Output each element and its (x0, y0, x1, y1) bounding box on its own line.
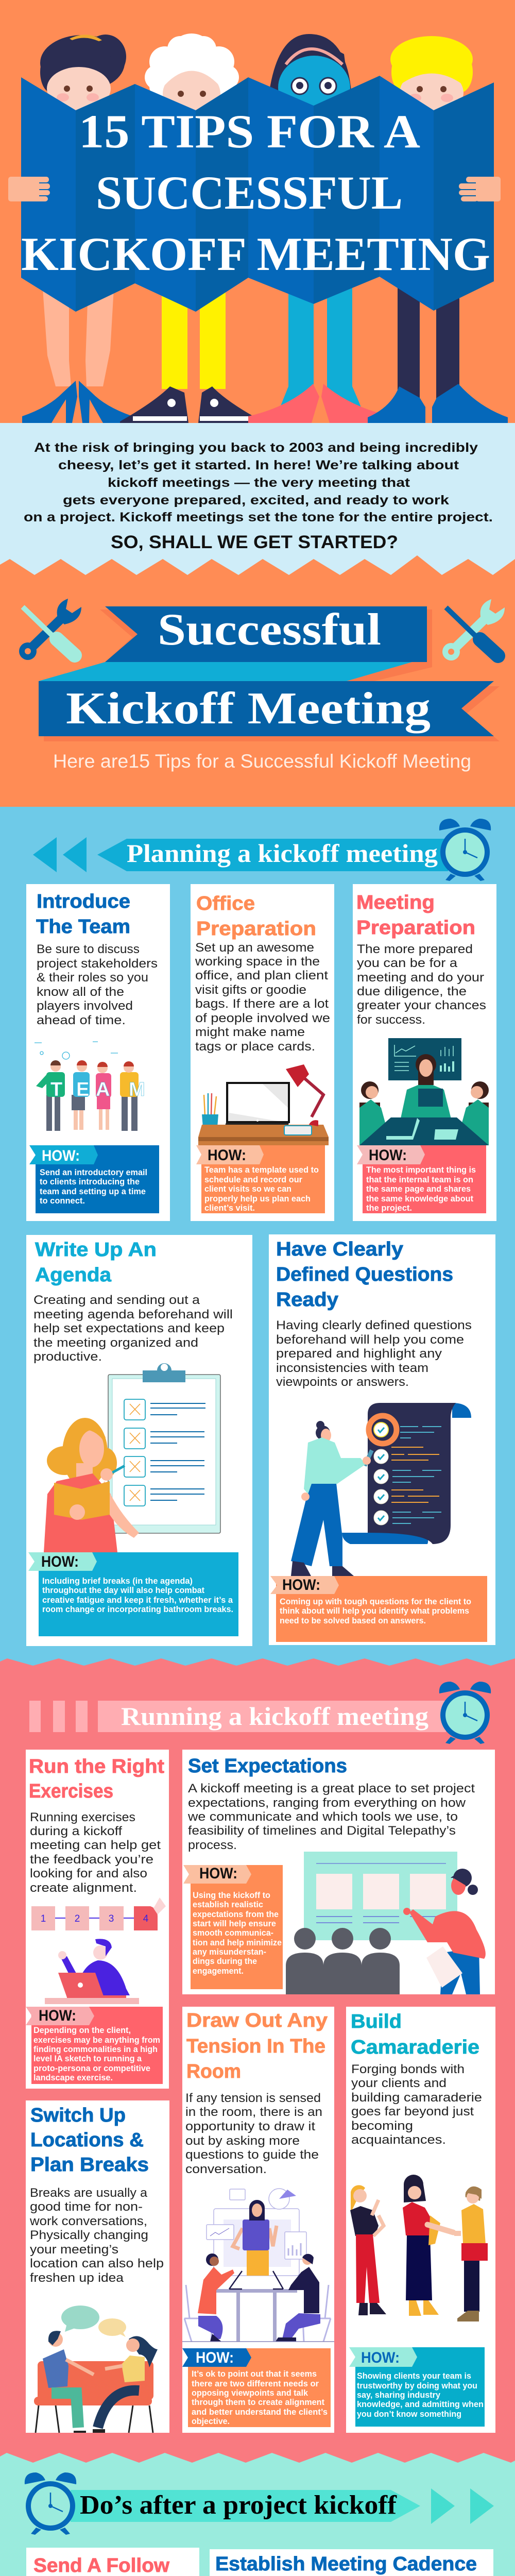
body text: meeting can help get (30, 1838, 161, 1852)
how callout (196, 1145, 325, 1213)
how callout: HOW: (41, 1553, 79, 1570)
how callout: client visits so we can (204, 1184, 291, 1194)
body text: viewpoints or answers. (276, 1375, 409, 1389)
intro text: At the risk of bringing you back to 2003 and being incredibly (34, 440, 478, 455)
how callout: Send an introductory email (40, 1168, 147, 1177)
how callout: think about will help you identify what problems (280, 1606, 469, 1616)
heading: Have Clearly (276, 1239, 403, 1260)
illustration: numbered steps and man at laptop: 1 (41, 1913, 46, 1924)
body text: tags or place cards. (195, 1040, 315, 1054)
how callout: to clients introducing the (40, 1177, 140, 1187)
title: 15 TIPS FOR A (79, 105, 420, 158)
body text: might make name (195, 1025, 305, 1039)
body text: greater your chances (357, 998, 486, 1012)
how callout: creative fatigue and keep it fresh, whether it’s a (42, 1596, 233, 1605)
body text: ahead of time. (37, 1013, 126, 1027)
body text: out by asking more (185, 2134, 300, 2148)
illustration: team meeting with board (359, 1038, 489, 1145)
how callout: the same knowledge about (366, 1194, 473, 1204)
body text: working space in the (195, 955, 320, 969)
how callout: schedule and record our (204, 1175, 303, 1184)
illustration: presenter at board with audience (286, 1852, 486, 1994)
how callout (29, 1145, 159, 1213)
call to action: SO, SHALL WE GET STARTED? (111, 532, 398, 552)
how callout: HOW: (369, 1147, 407, 1164)
body text (351, 2062, 482, 2147)
panel: Office Preparation (191, 884, 334, 1221)
person 3 (248, 34, 391, 423)
how callout: establish realistic (193, 1900, 263, 1909)
body text (37, 942, 158, 1027)
how callout: need to be solved based on answers. (280, 1616, 426, 1625)
heading: Introduce (37, 891, 130, 912)
how callout: HOW: (361, 2349, 400, 2366)
how callout: The most important thing is (366, 1165, 476, 1175)
body text: know all of the (37, 985, 124, 999)
ribbon title: Successful Kickoff Meeting (39, 605, 500, 741)
how callout: dings during the (193, 1957, 257, 1966)
heading: Agenda (35, 1264, 112, 1286)
how callout: Showing clients your team is (357, 2371, 471, 2381)
how callout: proto-persona or competitive (33, 2064, 150, 2073)
heading: Establish Meeting Cadence (215, 2553, 477, 2575)
how callout: opposing viewpoints and talk (192, 2388, 308, 2398)
body text: opportunity to draw it (185, 2120, 315, 2133)
body text: work conversations, (29, 2214, 147, 2228)
hands (8, 177, 501, 201)
body text (357, 942, 486, 1027)
how callout: knowledge, and admitting when (357, 2400, 484, 2409)
how callout (357, 1145, 486, 1213)
heading: Build (351, 2011, 402, 2032)
heading: Set Expectations (188, 1755, 347, 1777)
how callout: Coming up with tough questions for the client to (280, 1597, 471, 1606)
panel: Have Clearly Defined Questions Ready (269, 1234, 495, 1645)
heading: Ready (276, 1289, 338, 1311)
body text: process. (188, 1838, 237, 1852)
how callout: expectations from the (193, 1910, 279, 1919)
how callout: It’s ok to point out that it seems (192, 2369, 317, 2379)
heading: Defined Questions (276, 1264, 453, 1285)
ribbon text: Kickoff Meeting (66, 684, 431, 734)
section banner: Do's after a project kickoff (71, 2488, 494, 2524)
body text: help set expectations and keep (33, 1321, 225, 1335)
how callout: engagement. (193, 1967, 244, 1976)
body text: in the room, there is an (185, 2105, 322, 2119)
heading: Camaraderie (351, 2037, 479, 2058)
body text: your meeting’s (30, 2243, 118, 2257)
heading (276, 1239, 453, 1311)
folded sheet (21, 76, 494, 312)
how callout: exercises may be anything from (33, 2036, 160, 2045)
how callout: tion and help minimize (193, 1938, 282, 1947)
illustration: meeting around a table (182, 2189, 334, 2342)
panel: Set Expectations (182, 1750, 495, 1994)
body text (30, 1810, 161, 1895)
how callout (28, 1552, 238, 1636)
body text: acquaintances. (351, 2133, 446, 2147)
intro panel (0, 423, 515, 575)
body text: create alignment. (30, 1881, 137, 1895)
body text: Having clearly defined questions (276, 1318, 472, 1332)
how callout: Including brief breaks (in the agenda) (42, 1577, 193, 1586)
body text: Breaks are usually a (30, 2186, 148, 2200)
how callout: room change or incorporating bathroom breaks. (42, 1605, 233, 1614)
body text: location can also help (30, 2257, 164, 2270)
heading (186, 2010, 328, 2082)
intro text: cheesy, let’s get it started. In here! We’re talking about (58, 458, 459, 472)
how callout: HOW: (282, 1577, 320, 1594)
title (21, 105, 490, 280)
heading: Preparation (356, 917, 475, 939)
body text: beforehand will help you come (276, 1333, 464, 1347)
panel: Switch Up Locations & Plan Breaks (26, 2100, 169, 2433)
intro text: kickoff meetings — the very meeting that (108, 476, 410, 490)
illustration: office desk (198, 1064, 329, 1145)
heading: Run the Right (29, 1756, 164, 1777)
illustration: team holding letters: T (50, 1079, 62, 1100)
title: SUCCESSFUL (96, 166, 403, 219)
heading (29, 1756, 164, 1802)
body text: you can be for a (357, 956, 458, 970)
illustration: two people talking on a couch (34, 2306, 158, 2433)
body text: meeting agenda beforehand will (33, 1308, 233, 1321)
body text: Be sure to discuss (37, 942, 140, 956)
how callout: that the internal team is on (366, 1175, 473, 1184)
body text: visit gifts or goodie (195, 983, 306, 997)
heading: Send A Follow (33, 2555, 169, 2576)
panel: Draw Out Any Tension In The Room (182, 2007, 334, 2433)
illustration: clipboard and woman with book (44, 1363, 220, 1552)
section banner: Do's after a project kickoff: Do’s after a project kickoff (80, 2490, 397, 2520)
how callout: team and setting up a time (40, 1187, 146, 1196)
panel: Send A Follow Up Email (26, 2548, 199, 2576)
heading: Locations & (30, 2129, 144, 2151)
body text: meeting and do your (357, 971, 484, 985)
person 1 (22, 35, 133, 423)
panel: Build Camaraderie (346, 2007, 495, 2433)
section banner: Planning a kickoff meeting (33, 837, 448, 872)
body text: feasibility of timelines and Digital Telepathy’s (188, 1824, 456, 1838)
body text: the feedback you’re (30, 1853, 153, 1867)
panel: Write Up An Agenda (26, 1235, 252, 1646)
body text (187, 1782, 475, 1852)
heading: Room (186, 2061, 241, 2082)
body text: your clients and (351, 2076, 447, 2090)
how callout: there are two different needs or (192, 2379, 319, 2388)
how callout: properly help us plan each (204, 1194, 311, 1204)
illustration: checklist scroll and person (291, 1403, 471, 1576)
illustration: team holding letters: E (76, 1079, 89, 1100)
how callout: HOW: (199, 1865, 237, 1882)
icon: left wrench and screwdriver (19, 599, 81, 660)
body text: due diligence, the (357, 985, 467, 998)
how callout (182, 2348, 331, 2427)
body text: If any tension is sensed (185, 2091, 321, 2105)
body text: & their roles so you (37, 971, 148, 985)
body text: Physically changing (30, 2228, 148, 2242)
section banner: Running a kickoff meeting: Running a kickoff meeting (121, 1702, 428, 1731)
how callout: HOW: (208, 1147, 246, 1164)
heading (36, 891, 130, 938)
how callout: client’s visit. (204, 1204, 255, 1213)
how callout: you don’t know something (357, 2410, 461, 2419)
panel: Establish Meeting Cadence and Project Tools (210, 2549, 493, 2576)
body text: Set up an awesome (195, 941, 314, 955)
section banner: Planning a kickoff meeting: Planning a kickoff meeting (127, 839, 438, 868)
body text: project stakeholders (37, 957, 158, 971)
heading (356, 892, 475, 939)
how callout (26, 2007, 163, 2084)
body text: productive. (33, 1350, 102, 1364)
how callout: through them to create alignment (192, 2398, 324, 2407)
how callout: say, sharing industry (357, 2391, 441, 2400)
heading (351, 2011, 479, 2058)
icon: alarm clock (25, 2472, 76, 2535)
body text: prepared and highlight any (276, 1347, 442, 1361)
panel: Run the Right Exercises (26, 1750, 169, 2089)
how callout: smooth communica- (193, 1928, 273, 1938)
body text: Creating and sending out a (33, 1293, 200, 1307)
body text: questions to guide the (185, 2148, 319, 2162)
body text: becoming (351, 2119, 413, 2133)
body text: A kickoff meeting is a great place to set project (188, 1782, 475, 1795)
illustration: team holding letters: M (129, 1079, 145, 1100)
heading: Plan Breaks (30, 2154, 149, 2176)
body text: we communicate and which tools we use, to (187, 1810, 458, 1824)
how callout: HOW: (39, 2007, 76, 2024)
heading (35, 1239, 157, 1286)
intro text: gets everyone prepared, excited, and ready to work (63, 493, 449, 507)
body text (195, 941, 330, 1054)
heading: Write Up An (35, 1239, 157, 1261)
how callout: Team has a template used to (204, 1165, 319, 1175)
icon: alarm clock (439, 819, 491, 881)
illustration: numbered steps and man at laptop: 2 (75, 1913, 80, 1924)
panel: Meeting Preparation (353, 884, 496, 1221)
body text: office, and plan client (195, 969, 328, 982)
hero illustration: four people holding a folded sheet (8, 33, 508, 423)
body text: freshen up idea (30, 2271, 124, 2285)
body text: conversation. (185, 2162, 267, 2176)
body text: the meeting organized and (33, 1336, 198, 1350)
how callout (270, 1576, 487, 1642)
ribbon text (66, 605, 431, 734)
body text (33, 1293, 233, 1364)
heading: Tension In The (186, 2036, 325, 2057)
how callout: any misunderstan- (193, 1947, 266, 1957)
body text: during a kickoff (30, 1824, 122, 1838)
heading: Switch Up (30, 2105, 126, 2126)
how callout: throughout the day will also help combat (42, 1586, 204, 1595)
how callout: the project. (366, 1204, 412, 1213)
how callout: HOW: (196, 2349, 234, 2366)
how callout: the same page and shares (366, 1184, 471, 1194)
illustration: numbered steps and man at laptop (31, 1897, 166, 2004)
how callout: and better understand the client’s (192, 2408, 328, 2417)
body text: inconsistencies with team (276, 1361, 428, 1375)
heading (30, 2105, 149, 2176)
body text: expectations, ranging from everything on how (188, 1796, 466, 1810)
body text: bags. If there are a lot (195, 997, 329, 1011)
body text (276, 1318, 472, 1389)
illustration: numbered steps and man at laptop: 4 (143, 1913, 149, 1924)
subtitle: Here are15 Tips for a Successful Kickoff Meeting (53, 751, 471, 772)
illustration: numbered steps and man at laptop: 3 (109, 1913, 114, 1924)
heading: The Team (36, 916, 130, 938)
illustration: handshake and applause (350, 2175, 488, 2321)
section banner: Running a kickoff meeting (29, 1701, 446, 1732)
body text: for success. (357, 1013, 425, 1027)
how callout: level IA sketch to running a (33, 2054, 142, 2063)
how callout: trustworthy by doing what you (357, 2381, 477, 2391)
how callout: start will help ensure (193, 1919, 276, 1928)
body text: players involved (37, 999, 133, 1013)
heading: Office (196, 893, 255, 914)
body text: goes far beyond just (351, 2105, 474, 2119)
body text: The more prepared (357, 942, 473, 956)
body text: looking for and also (30, 1867, 147, 1880)
how callout: landscape exercise. (33, 2073, 113, 2082)
icon: right wrench and screwdriver (442, 599, 505, 660)
body text: building camaraderie (351, 2091, 482, 2105)
ribbon text: Successful (158, 605, 381, 655)
heading: Exercises (29, 1781, 113, 1802)
how callout: Using the kickoff to (193, 1891, 270, 1900)
title: KICKOFF MEETING (21, 228, 490, 280)
body text (185, 2091, 322, 2176)
how callout (183, 1865, 283, 1989)
heading: Preparation (196, 918, 316, 940)
person 2 (120, 33, 263, 423)
heading: Draw Out Any (186, 2010, 328, 2031)
how callout: finding commonalities in a high (33, 2045, 158, 2054)
intro text (24, 440, 493, 524)
body text: Running exercises (30, 1810, 135, 1824)
body text: good time for non- (30, 2200, 143, 2214)
body text: Forging bonds with (351, 2062, 465, 2076)
illustration: team holding letters: A (96, 1079, 110, 1100)
body text (29, 2186, 164, 2285)
how callout (349, 2347, 485, 2427)
intro text: on a project. Kickoff meetings set the tone for the entire project. (24, 510, 493, 524)
how callout: objective. (192, 2417, 230, 2426)
how callout: Depending on the client, (33, 2026, 131, 2035)
icon: alarm clock (439, 1682, 491, 1744)
person 4 (368, 36, 508, 423)
panel: Introduce The Team (26, 884, 170, 1221)
heading: Meeting (356, 892, 435, 913)
body text: of people involved we (195, 1011, 330, 1025)
how callout: HOW: (42, 1147, 80, 1164)
illustration: team holding letters (35, 1042, 145, 1131)
how callout: to connect. (40, 1196, 85, 1206)
heading (196, 893, 316, 940)
